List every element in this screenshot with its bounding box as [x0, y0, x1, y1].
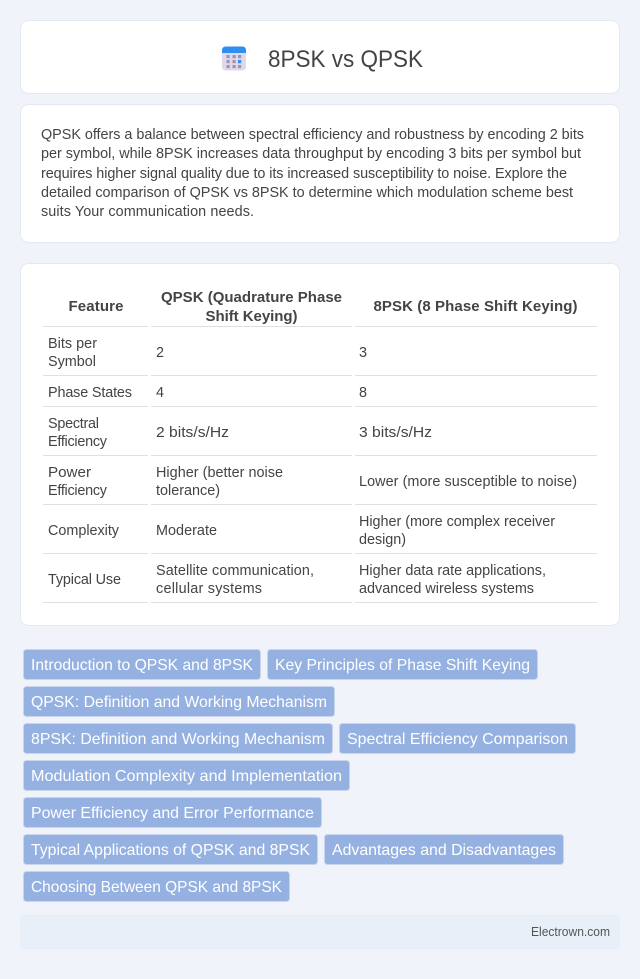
tag: QPSK: Definition and Working Mechanism — [31, 694, 327, 711]
tag — [24, 650, 260, 680]
row: complexity: Complexity — [48, 523, 120, 539]
tag: Modulation Complexity and Implementation — [31, 768, 342, 785]
row: complexity: design) — [359, 532, 406, 548]
panel: topic tags — [24, 650, 576, 902]
row: phase states: 8 — [359, 385, 367, 401]
row: phase states — [48, 385, 367, 401]
row: bits per symbol: Symbol — [48, 354, 96, 370]
row: power efficiency: Lower (more susceptible to noise) — [359, 474, 577, 490]
table header: Feature — [68, 298, 124, 315]
row: typical use: cellular systems — [156, 581, 262, 597]
row: bits per symbol: 2 — [156, 345, 164, 361]
footer — [20, 915, 620, 949]
tag — [24, 760, 350, 790]
tag — [24, 798, 322, 828]
row: spectral efficiency: 2 bits/s/Hz — [156, 425, 229, 441]
row: bits per symbol: 3 — [359, 345, 367, 361]
tag — [324, 834, 564, 864]
row: typical use: Higher data rate applications, — [359, 563, 546, 579]
row: power efficiency: Efficiency — [48, 483, 108, 499]
icon: calendar — [222, 46, 246, 70]
row: power efficiency: Power — [48, 465, 91, 481]
tag — [268, 650, 538, 680]
table header: QPSK (Quadrature Phase — [161, 289, 342, 306]
table header: 8PSK (8 Phase Shift Keying) — [374, 298, 578, 315]
row: typical use: Typical Use — [48, 572, 121, 588]
table header — [68, 289, 578, 325]
panel: introduction — [20, 104, 620, 242]
tag: Introduction to QPSK and 8PSK — [31, 657, 253, 674]
row: bits per symbol — [48, 336, 367, 370]
row: spectral efficiency — [48, 416, 432, 450]
row: spectral efficiency: Spectral — [48, 416, 99, 432]
panel: comparison table — [20, 264, 620, 626]
text block: introduction: detailed comparison of QPSK vs 8PSK to determine which modulation scheme best — [41, 185, 573, 201]
text block: introduction — [41, 127, 584, 220]
row: spectral efficiency: 3 bits/s/Hz — [359, 425, 432, 441]
text block: introduction: suits Your communication needs. — [41, 204, 254, 220]
row: spectral efficiency: Efficiency — [48, 434, 108, 450]
tag — [24, 872, 290, 902]
tag: Key Principles of Phase Shift Keying — [275, 657, 530, 674]
tag: Choosing Between QPSK and 8PSK — [31, 879, 282, 896]
row: typical use: Satellite communication, — [156, 563, 314, 579]
row: typical use — [48, 563, 546, 597]
row: complexity: Higher (more complex receiver — [359, 514, 555, 530]
tag — [24, 724, 332, 754]
row: phase states: 4 — [156, 385, 164, 401]
row: power efficiency: Higher (better noise — [156, 465, 283, 481]
tag: Typical Applications of QPSK and 8PSK — [31, 842, 310, 859]
row: power efficiency: tolerance) — [156, 483, 220, 499]
tag — [24, 834, 318, 864]
text block: introduction: requires higher signal quality due to its increased susceptibility to noise. Explore the — [41, 166, 567, 182]
row: bits per symbol: Bits per — [48, 336, 97, 352]
title: 8PSK vs QPSK — [268, 46, 423, 73]
tag: Spectral Efficiency Comparison — [347, 731, 568, 748]
row: power efficiency — [48, 465, 577, 499]
panel: header — [20, 20, 620, 94]
tag: 8PSK: Definition and Working Mechanism — [31, 731, 325, 748]
row: typical use: advanced wireless systems — [359, 581, 534, 597]
footer: Electrown.com — [531, 924, 610, 939]
row: complexity — [48, 514, 555, 548]
row: complexity: Moderate — [156, 523, 217, 539]
tag: Power Efficiency and Error Performance — [31, 805, 314, 822]
text block: introduction: QPSK offers a balance between spectral efficiency and robustness by encoding 2 bits — [41, 127, 584, 143]
row: phase states: Phase States — [48, 385, 132, 401]
tag — [24, 686, 334, 716]
table header: Shift Keying) — [206, 308, 298, 325]
tag: Advantages and Disadvantages — [332, 842, 556, 859]
tag — [340, 724, 576, 754]
text block: introduction: per symbol, while 8PSK increases data throughput by encoding 3 bits per symbol but — [41, 146, 581, 162]
